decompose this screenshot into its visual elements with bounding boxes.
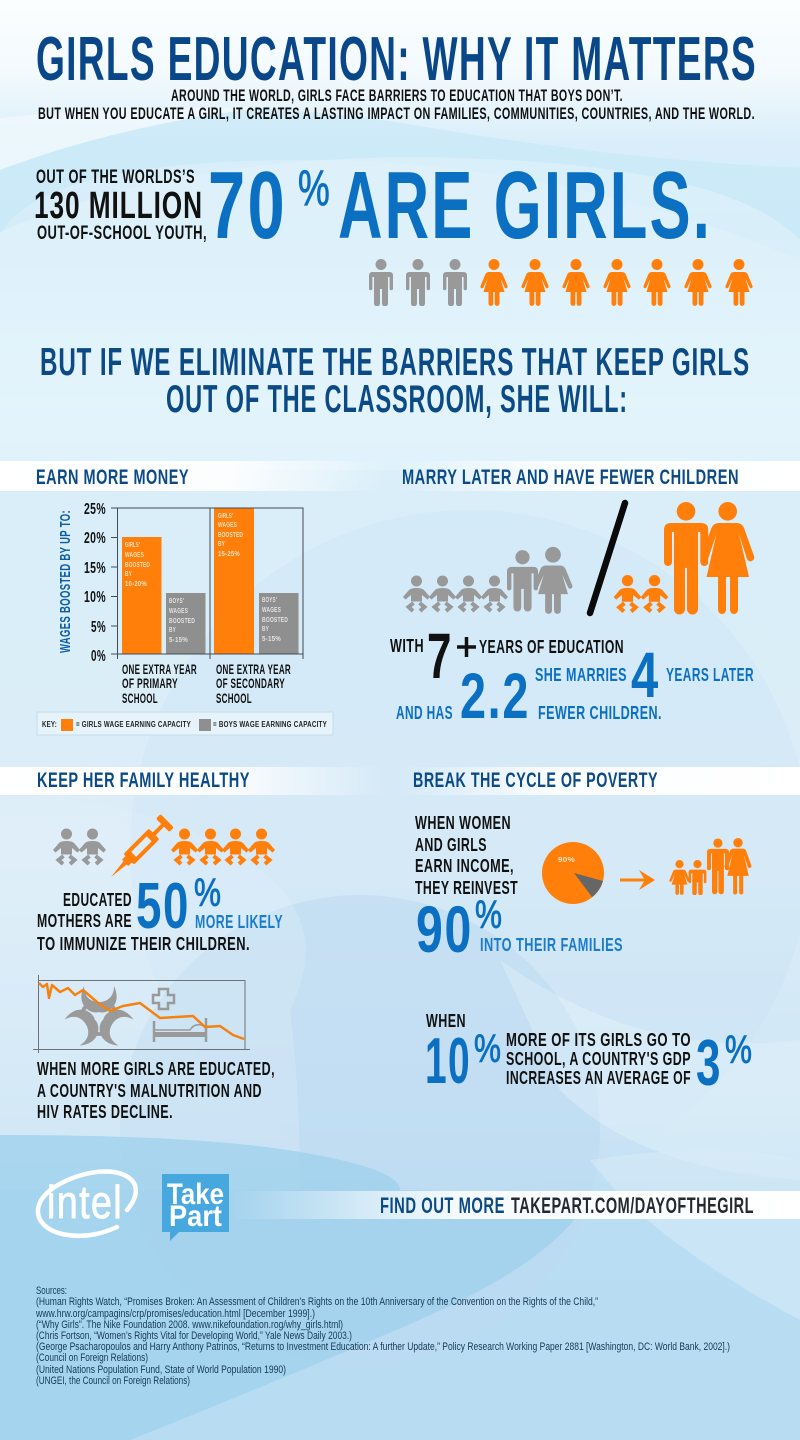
bar chart: wages boosted: GIRLS' [125,540,140,549]
line chart: malnutrition and HIV decline [33,975,250,1053]
bar chart: wages boosted: 20% [84,530,106,547]
statistic: reinvest 90% into their families: INTO THEIR FAMILIES [480,935,623,955]
statistic: 10% more girls, GDP up 3%: 3 [696,1026,722,1099]
text: malnutrition and HIV rates [37,1059,275,1122]
statistic: 10% more girls, GDP up 3%: MORE OF ITS GIRLS GO TO [506,1030,691,1050]
icon: syringe [104,814,174,884]
bar chart: wages boosted [58,501,303,706]
heading band: keep her family healthy [0,767,385,795]
logo: TakePart: Take [167,1178,224,1211]
statistic: reinvest 90% into their families: WHEN WOMEN [415,813,511,833]
bar chart: wages boosted: BY [169,625,176,634]
panel: marry later and have fewer children [390,461,800,732]
statistic: 10% more girls, GDP up 3%: % [725,1029,753,1072]
bar chart: wages boosted: SCHOOL [122,690,158,706]
headline statistic: 70% are girls: % [298,160,331,216]
bar chart: wages boosted: 15-25% [218,549,240,558]
call to action band: FIND OUT MORE [380,1193,505,1218]
bar chart: wages boosted: 5-15% [262,634,281,643]
divider slash [590,503,625,613]
heading band: keep her family healthy: KEEP HER FAMILY HEALTHY [37,769,250,792]
statistic: reinvest 90% into their families: % [475,894,503,937]
statistic: reinvest 90% into their families: 90 [416,892,473,966]
bar chart: wages boosted: 15% [84,560,106,577]
heading band: earn more money [0,461,385,491]
sources: (Human Rights Watch, “Promises Broken: An Assessment of Children’s Rights on the 10th Anniversary of the Convention on the Rights of the Child,” [36,1296,598,1308]
heading band: earn more money: EARN MORE MONEY [36,466,189,489]
bar chart: wages boosted: BOYS' [169,596,184,605]
bar chart: wages boosted: ONE EXTRA YEAR [216,661,291,677]
panel: break the cycle of poverty [395,767,800,1099]
bar chart: wages boosted: WAGES [125,550,144,559]
statistic: 7+ years of education, 2.2 fewer children, 4 years later: YEARS OF EDUCATION [479,637,624,657]
bar chart: wages boosted: GIRLS' [218,511,233,520]
bar chart: wages boosted: WAGES BOOSTED BY UP TO: [58,510,74,653]
bar chart: wages boosted: OF PRIMARY [122,675,178,691]
statistic: 50% more likely to immunize: MOTHERS ARE [37,911,132,931]
bar chart: wages boosted: SCHOOL [216,690,252,706]
heading band: break the cycle: BREAK THE CYCLE OF POVERTY [413,769,658,792]
sources: www.hrw.org/campagins/crp/promises/education.html [December 1999].) [35,1308,315,1320]
bar chart: wages boosted: BOOSTED [125,560,150,569]
panel: keep her family healthy [0,767,385,1122]
main heading [40,341,750,421]
headline statistic: 70% are girls: OUT OF THE WORLDS’S [36,167,195,188]
statistic: 7+ years of education, 2.2 fewer children, 4 years later: YEARS LATER [666,665,754,685]
statistic: reinvest 90% into their families [415,813,623,966]
statistic: reinvest 90% into their families: AND GIRLS [415,835,487,855]
sources [35,1285,730,1387]
logo: intel: intel [47,1176,123,1228]
bar chart: wages boosted: BOOSTED [262,615,288,624]
statistic: 50% more likely to immunize: EDUCATED [63,890,132,910]
sources: (UNGEI, the Council on Foreign Relations) [36,1375,190,1387]
statistic: 7+ years of education, 2.2 fewer children, 4 years later: SHE MARRIES [535,665,627,685]
headline statistic: 70% are girls [34,152,712,259]
statistic: 7+ years of education, 2.2 fewer children, 4 years later [390,620,754,732]
text: malnutrition and HIV rates: HIV RATES DECLINE. [37,1102,173,1122]
statistic: 10% more girls, GDP up 3%: SCHOOL, A COUNTRY'S GDP [506,1049,691,1069]
icon: gray family with four children [403,547,572,614]
bar chart: wages boosted: WAGES [169,606,188,615]
bar chart: wages boosted: WAGES [262,605,281,614]
sources: (“Why Girls”. The Nike Foundation 2008. www.nikefoundation.rog/why_girls.html) [36,1319,343,1331]
statistic: 50% more likely to immunize [37,869,283,954]
icon: family [669,838,751,895]
logo: TakePart: Part [169,1200,222,1233]
bar chart: wages boosted: BY [262,624,269,633]
bar chart: wages boosted: BY [125,569,132,578]
statistic: reinvest 90% into their families: EARN INCOME, [415,856,514,876]
bar chart: wages boosted: OF SECONDARY [216,675,285,691]
text: malnutrition and HIV rates: A COUNTRY'S MALNUTRITION AND [37,1081,262,1101]
headline statistic: 70% are girls: 130 MILLION [34,185,203,227]
icon: two gray babies [53,828,106,864]
statistic: 7+ years of education, 2.2 fewer children, 4 years later: WITH [390,636,424,656]
chart key [37,712,333,735]
sources: (United Nations Population Fund, State of World Population 1990) [36,1364,286,1376]
statistic: 7+ years of education, 2.2 fewer children, 4 years later: 2.2 [460,660,530,732]
statistic: 50% more likely to immunize: MORE LIKELY [195,912,283,932]
bar chart: wages boosted: 10% [84,589,106,606]
panel: earn more money [0,461,385,735]
icon: biohazard [63,986,135,1048]
statistic: 7+ years of education, 2.2 fewer children, 4 years later: 4 [631,639,660,711]
statistic: 10% more girls, GDP up 3%: INCREASES AN AVERAGE OF [506,1068,691,1088]
statistic: 7+ years of education, 2.2 fewer children, 4 years later: FEWER CHILDREN. [538,703,662,723]
arrow [620,870,655,890]
bar chart: wages boosted: 25% [84,501,106,518]
icon: orange family with two children [614,502,754,614]
sources: Sources: [36,1285,67,1297]
chart key: = BOYS WAGE EARNING CAPACITY [213,720,327,729]
bar chart: wages boosted: 0% [91,648,106,665]
bar chart: wages boosted: BY [218,539,225,548]
bar chart: wages boosted: 5-15% [169,635,188,644]
intro text [38,87,755,123]
bar chart: wages boosted: 10-20% [125,579,147,588]
call to action band [232,1191,800,1219]
pie chart: 90 percent: 90% [558,857,576,864]
bar chart: wages boosted: BOYS' [262,595,277,604]
icon: four orange babies [171,828,275,864]
statistic: 7+ years of education, 2.2 fewer children, 4 years later: 7 [427,620,453,692]
icon: hospital bed [154,1018,206,1042]
statistic: 10% more girls, GDP up 3%: WHEN [426,1011,466,1031]
pictogram: 3 boys and 7 girls out of school [369,259,753,306]
pie chart: 90 percent [542,842,604,904]
sources: (Chris Fortson, “Women’s Rights Vital for Developing World,” Yale News Daily 2003.) [36,1330,352,1342]
statistic: 10% more girls, GDP up 3% [425,1011,753,1099]
statistic: 10% more girls, GDP up 3%: % [474,1028,502,1071]
sources: (Council on Foreign Relations) [36,1352,148,1364]
bar chart: wages boosted: WAGES [218,520,237,529]
bar chart: wages boosted: BOOSTED [218,530,243,539]
text: malnutrition and HIV rates: WHEN MORE GIRLS ARE EDUCATED, [37,1059,275,1079]
statistic: 50% more likely to immunize: TO IMMUNIZE THEIR CHILDREN. [37,934,250,954]
statistic: reinvest 90% into their families: THEY REINVEST [415,878,518,898]
logo: TakePart [162,1174,229,1241]
statistic: 7+ years of education, 2.2 fewer children, 4 years later: AND HAS [396,703,453,723]
statistic: 50% more likely to immunize: % [194,872,222,915]
chart key: = GIRLS WAGE EARNING CAPACITY [76,720,191,729]
chart key: KEY: [42,720,57,729]
bar chart: wages boosted: BOOSTED [169,616,195,625]
headline statistic: 70% are girls: 70 [208,152,287,259]
bar chart: wages boosted: ONE EXTRA YEAR [122,661,197,677]
icon: medical cross [153,989,174,1009]
statistic: 50% more likely to immunize: 50 [136,869,190,942]
bar chart: wages boosted: 5% [91,619,106,636]
headline statistic: 70% are girls: OUT-OF-SCHOOL YOUTH, [37,223,207,244]
statistic: 10% more girls, GDP up 3%: 10 [425,1024,471,1097]
